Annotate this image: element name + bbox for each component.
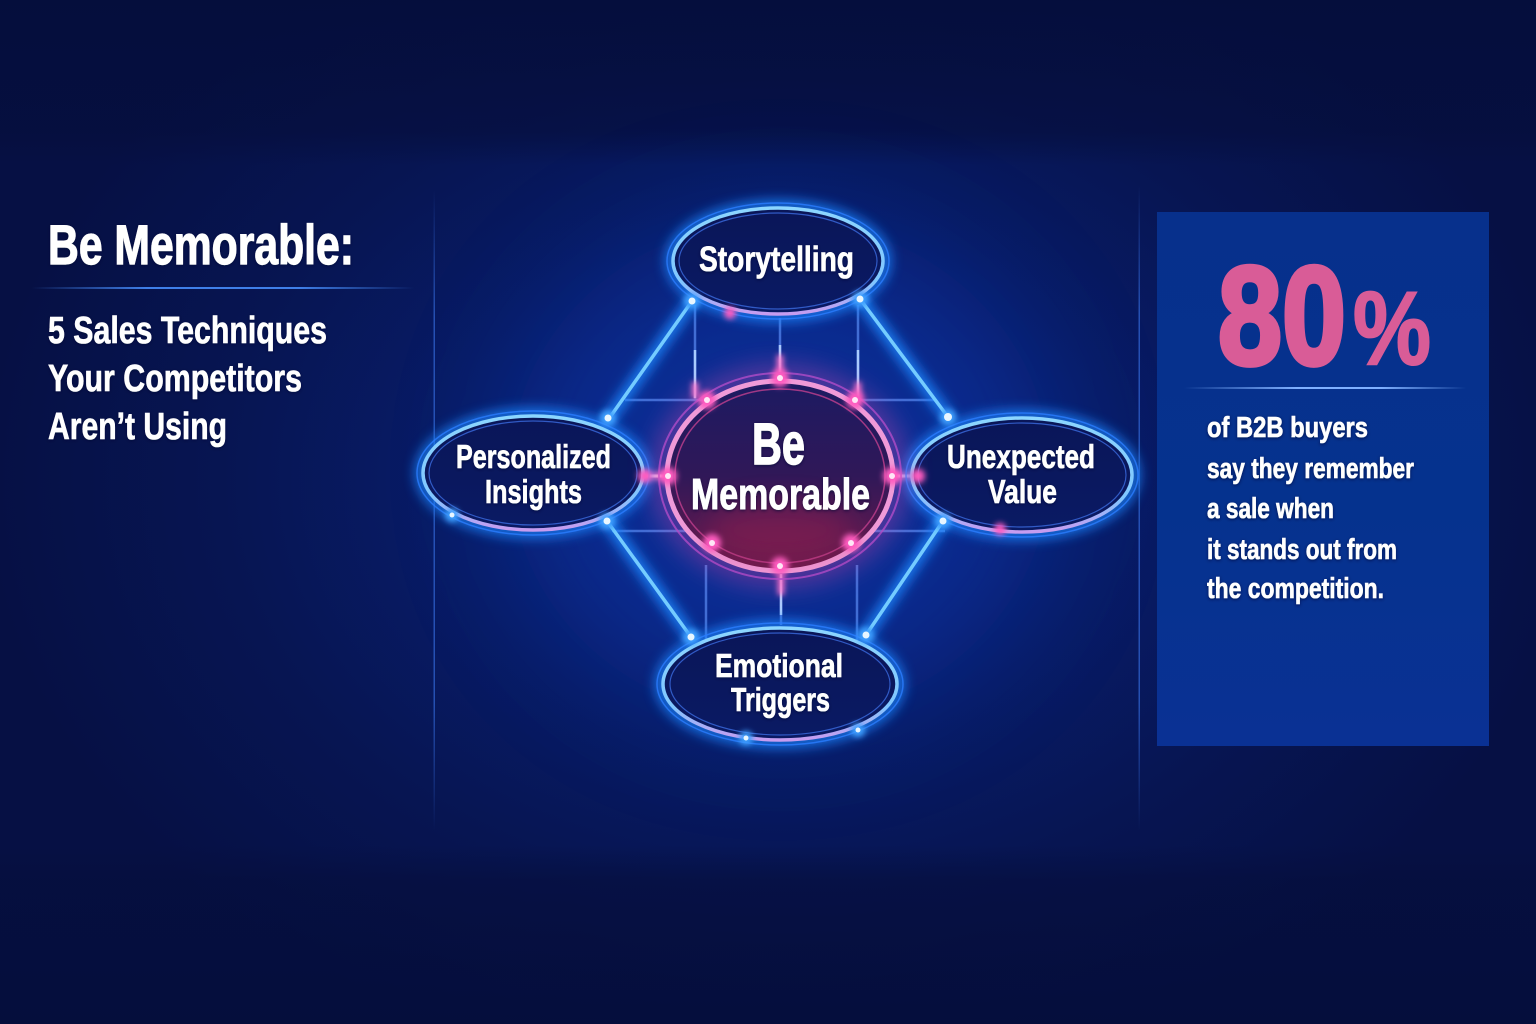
node: Be Memorable (centre): Be	[752, 412, 805, 477]
stat description: it stands out from	[1207, 534, 1397, 566]
panel: 80% statistic	[1157, 212, 1489, 746]
node: Emotional Triggers	[657, 623, 903, 745]
stat description	[1207, 412, 1414, 605]
node: Personalized Insights: Personalized	[456, 438, 611, 475]
big number: 80	[1218, 237, 1346, 394]
subtitle: 5 Sales Techniques	[48, 310, 327, 352]
bright spokes to the centre	[695, 345, 858, 615]
title: Be Memorable:	[48, 213, 354, 276]
heading block	[32, 213, 414, 448]
subtitle: Aren’t Using	[48, 406, 227, 448]
diagram: hub and spoke network	[417, 203, 1138, 745]
node: Unexpected Value	[906, 413, 1138, 537]
inner grid lines	[612, 305, 945, 640]
horizontal links	[645, 474, 918, 478]
subtitle	[48, 310, 327, 448]
big number: %	[1353, 271, 1431, 387]
stat description: the competition.	[1207, 573, 1384, 605]
outer connectors	[607, 299, 948, 637]
stat description: say they remember	[1207, 453, 1414, 485]
node: Unexpected Value: Value	[988, 473, 1057, 510]
node: Be Memorable (centre)	[659, 373, 901, 579]
node: Storytelling	[667, 203, 889, 319]
node: Unexpected Value: Unexpected	[947, 438, 1095, 475]
stat description: of B2B buyers	[1207, 412, 1368, 444]
stat description: a sale when	[1207, 493, 1334, 525]
node: Storytelling: Storytelling	[699, 240, 854, 279]
node: Emotional Triggers: Emotional	[715, 647, 843, 684]
node: Personalized Insights: Insights	[485, 473, 582, 510]
node: Emotional Triggers: Triggers	[731, 681, 830, 718]
node: Be Memorable (centre): Memorable	[691, 470, 870, 519]
glowing junction points	[445, 291, 1006, 745]
node: Personalized Insights	[417, 411, 649, 535]
subtitle: Your Competitors	[48, 358, 302, 400]
